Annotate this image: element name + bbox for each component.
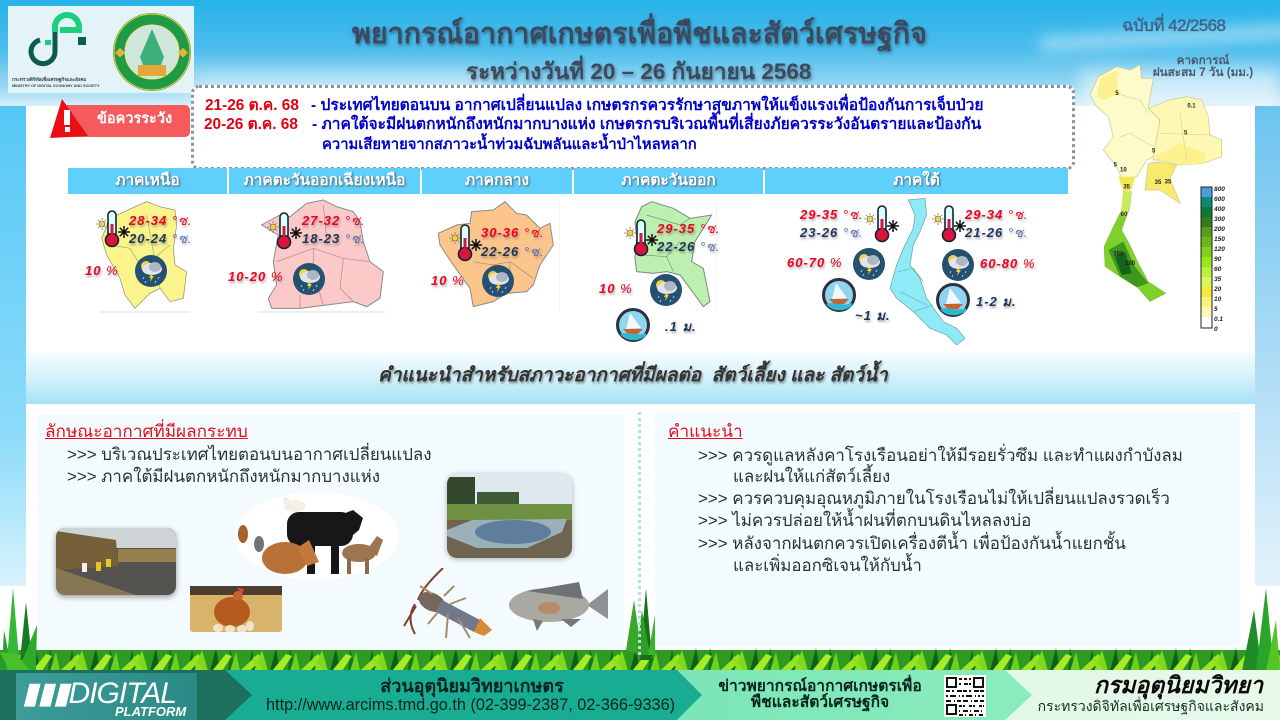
icons: east <box>618 220 682 340</box>
warning line 1 <box>205 94 983 114</box>
rain accumulation map of Thailand: 35 <box>1165 179 1172 185</box>
warning message box <box>191 85 1075 170</box>
rain accumulation map of Thailand <box>1090 65 1222 302</box>
ministry name: กระทรวงดิจิทัลเพื่อเศรษฐกิจและสังคม <box>12 76 86 83</box>
department name: กรมอุตุนิยมวิทยา <box>1094 672 1263 698</box>
rain legend colour bar: 600 <box>1214 196 1225 203</box>
region header: northeast: ภาคตะวันออกเฉียงเหนือ <box>244 172 405 189</box>
region header: northeast <box>229 168 420 194</box>
section banner <box>26 352 1255 404</box>
impact heading: ลักษณะอากาศที่มีผลกระทบ <box>45 421 248 441</box>
south west coast temperature, rain and wave: ~1 ม. <box>855 308 891 323</box>
northeast temperature and rain <box>228 213 366 284</box>
warning label: ข้อควรระวัง <box>97 111 172 127</box>
central temperature and rain: 10 % <box>431 273 465 288</box>
recommendation 4: และเพิ่มออกซิเจนให้กับน้ำ <box>733 556 922 575</box>
rain legend colour bar: 120 <box>1214 246 1225 253</box>
recommendations heading: คำแนะนำ <box>668 421 743 441</box>
south east coast temperature, rain and wave: 60-80 % <box>980 256 1035 271</box>
icons: northeast <box>267 213 325 295</box>
rain legend colour bar: 90 <box>1214 256 1222 263</box>
panel: recommendations <box>655 412 1240 647</box>
region header: north: ภาคเหนือ <box>115 172 180 189</box>
region header: south <box>765 168 1068 194</box>
south east coast temperature, rain and wave: 29-34 °ซ. <box>965 207 1029 222</box>
digital platform logo: ▮▮▮DIGITAL <box>22 677 176 710</box>
rain legend colour bar: 0.1 <box>1214 316 1223 323</box>
ministry name: MINISTRY OF DIGITAL ECONOMY AND SOCIETY <box>12 84 100 88</box>
rain accumulation map of Thailand: 5 <box>1184 131 1188 137</box>
photo: animal shelter <box>52 526 180 601</box>
impact line 1: >>> บริเวณประเทศไทยตอนบนอากาศเปลี่ยนแปลง <box>67 445 432 464</box>
right blue side band <box>1255 106 1280 586</box>
forecast news label: ข่าวพยากรณ์อากาศเกษตรเพื่อ <box>718 678 922 695</box>
rain accumulation map of Thailand: 200 <box>1125 261 1136 267</box>
region header: east: ภาคตะวันออก <box>621 172 716 189</box>
photo: livestock <box>235 492 399 580</box>
northeast temperature and rain: 10-20 % <box>228 269 283 284</box>
panel: weather with impact <box>37 415 624 650</box>
rain accumulation map of Thailand: 5 <box>1114 163 1118 169</box>
baselines under maps <box>100 311 385 313</box>
agromet division name: ส่วนอุตุนิยมวิทยาเกษตร <box>380 676 564 696</box>
rain legend colour bar: 10 <box>1214 296 1222 303</box>
rain legend colour bar: 300 <box>1214 216 1225 223</box>
ministry name <box>12 76 100 88</box>
digital platform logo <box>16 673 197 720</box>
central temperature and rain: 30-36 °ซ. <box>481 225 545 240</box>
warning line 2: - ภาคใต้จะมีฝนตกหนักถึงหนักมากบางแห่ง เกษตรกรบริเวณพื้นที่เสี่ยงภัยควรระวังอันตรายและป้องกัน <box>312 116 981 133</box>
warning line 2 <box>204 112 982 133</box>
icon: warning triangle <box>50 99 88 138</box>
recommendation 4 <box>698 531 1126 575</box>
title: พยากรณ์อากาศเกษตรเพื่อพืชและสัตว์เศรษฐกิจ <box>352 18 927 50</box>
main white sheet <box>26 106 1255 651</box>
warning line 2: 20-26 ต.ค. 68 <box>204 116 298 133</box>
issue number: ฉบับที่ 42/2568 <box>1122 16 1225 35</box>
ministry line: กระทรวงดิจิทัลเพื่อเศรษฐกิจและสังคม <box>1038 698 1264 714</box>
region header: north <box>68 168 227 194</box>
rain accumulation map of Thailand: 10 <box>1120 168 1127 174</box>
logo panel <box>8 6 194 93</box>
rain legend colour bar: 35 <box>1214 276 1222 283</box>
date subtitle: ระหว่างวันที่ 20 – 26 กันยายน 2568 <box>466 59 811 84</box>
rain legend colour bar: 0 <box>1214 326 1218 333</box>
icons: north <box>96 211 167 287</box>
photo: hen on eggs <box>190 586 282 632</box>
map: south <box>890 198 965 345</box>
rain accumulation map of Thailand: 60 <box>1121 212 1128 218</box>
photo: tilapia fish <box>509 582 608 631</box>
rain accumulation map of Thailand: 35 <box>1123 184 1131 190</box>
footer <box>0 670 1280 720</box>
east temperature, rain and wave: 22-26 °ซ. <box>657 239 721 254</box>
panel divider <box>638 412 641 655</box>
digital platform logo: PLATFORM <box>115 704 186 719</box>
recommendation 4: >>> หลังจากฝนตกควรเปิดเครื่องตีน้ำ เพื่อป้องกันน้ำแยกชั้น <box>698 534 1126 553</box>
warning badge <box>50 99 190 138</box>
rain legend colour bar: 60 <box>1214 266 1222 273</box>
north temperature and rain: 20-24 °ซ. <box>129 231 193 246</box>
region header: central: ภาคกลาง <box>465 172 529 189</box>
south west coast temperature, rain and wave: 23-26 °ซ. <box>800 225 864 240</box>
recommendation 3: >>> ไม่ควรปล่อยให้น้ำฝนที่ตกบนดินไหลลงบ่อ <box>698 511 1031 530</box>
grass strip <box>0 588 1280 670</box>
logo: meteorological department emblem <box>113 13 191 91</box>
recommendation 1 <box>698 444 1183 486</box>
logo: digital economy ministry <box>31 15 86 64</box>
recommendation 1: และฝนให้แก่สัตว์เลี้ยง <box>733 467 890 486</box>
map: northeast <box>262 200 383 308</box>
recommendation 1: >>> ควรดูแลหลังคาโรงเรือนอย่าให้มีรอยรั่วซึม และทำแผงกำบังลม <box>698 446 1183 465</box>
rain accumulation map of Thailand: 5 <box>1152 149 1156 155</box>
section banner heading: คำแนะนำสำหรับสภาวะอากาศที่มีผลต่อ สัตว์เลี้ยง และ สัตว์น้ำ <box>378 365 888 386</box>
icons: south west coast <box>824 206 899 310</box>
east temperature, rain and wave <box>599 221 721 334</box>
east temperature, rain and wave: 29-35 °ซ. <box>657 221 721 236</box>
region header: east <box>574 168 763 194</box>
east temperature, rain and wave: .1 ม. <box>665 319 697 334</box>
rain legend colour bar: 150 <box>1214 236 1225 243</box>
rain legend colour bar: 800 <box>1214 186 1225 193</box>
south east coast temperature, rain and wave: 21-26 °ซ. <box>965 225 1029 240</box>
icons: central <box>449 225 514 297</box>
north temperature and rain: 28-34 °ซ. <box>129 213 193 228</box>
rain accumulation map of Thailand: 35 <box>1155 180 1162 186</box>
rain map caption: ฝนสะสม 7 วัน (มม.) <box>1153 66 1253 79</box>
rain accumulation map of Thailand: 5 <box>1115 91 1119 97</box>
rain accumulation map of Thailand: 100 <box>1113 251 1124 257</box>
warning line 1: 21-26 ต.ค. 68 <box>205 97 299 114</box>
recommendation 2: >>> ควรควบคุมอุณหภูมิภายในโรงเรือนไม่ให้เปลี่ยนแปลงรวดเร็ว <box>698 489 1170 508</box>
south west coast temperature, rain and wave <box>787 207 891 324</box>
rain legend colour bar <box>1201 186 1225 333</box>
northeast temperature and rain: 18-23 °ซ. <box>302 231 366 246</box>
rain legend colour bar: 20 <box>1213 286 1222 293</box>
rain legend colour bar: 400 <box>1213 206 1225 213</box>
region header: central <box>422 168 572 194</box>
south west coast temperature, rain and wave: 60-70 % <box>787 255 842 270</box>
map: east <box>635 200 716 310</box>
east temperature, rain and wave: 10 % <box>599 281 633 296</box>
map: north <box>102 202 187 308</box>
rain legend colour bar: 5 <box>1214 306 1218 313</box>
north temperature and rain: 10 % <box>85 263 119 278</box>
forecast news label: พืชและสัตว์เศรษฐกิจ <box>751 694 889 711</box>
south east coast temperature, rain and wave <box>964 207 1036 310</box>
north temperature and rain <box>85 213 193 278</box>
rain accumulation map of Thailand: 0.1 <box>1187 104 1196 110</box>
icons: south east coast <box>932 206 974 316</box>
contact url and phone: http://www.arcims.tmd.go.th (02-399-2387, 02-366-9336) <box>266 696 675 714</box>
left blue side band <box>0 106 26 586</box>
rain map caption: คาดการณ์ <box>1177 54 1229 67</box>
warning line 3: ความเสียหายจากสภาวะน้ำท่วมฉับพลันและน้ำป่าไหลหลาก <box>322 137 697 153</box>
photo: spiny lobster <box>403 568 492 638</box>
region header: south: ภาคใต้ <box>893 172 940 189</box>
impact line 2: >>> ภาคใต้มีฝนตกหนักถึงหนักมากบางแห่ง <box>67 467 380 486</box>
photo: farm pond <box>444 472 576 562</box>
sky background <box>0 0 1280 110</box>
central temperature and rain <box>431 225 545 288</box>
central temperature and rain: 22-26 °ซ. <box>481 244 545 259</box>
rain legend colour bar: 200 <box>1213 226 1225 233</box>
south west coast temperature, rain and wave: 29-35 °ซ. <box>800 207 864 222</box>
south east coast temperature, rain and wave: 1-2 ม. <box>976 294 1017 309</box>
northeast temperature and rain: 27-32 °ซ. <box>302 213 366 228</box>
warning line 1: - ประเทศไทยตอนบน อากาศเปลี่ยนแปลง เกษตรกรควรรักษาสุขภาพให้แข็งแรงเพื่อป้องกันการเจ็บป่วย <box>311 97 983 114</box>
rain map caption <box>1153 54 1253 79</box>
forecast news label <box>718 674 922 712</box>
map: central <box>438 198 559 310</box>
QR code <box>944 675 986 717</box>
